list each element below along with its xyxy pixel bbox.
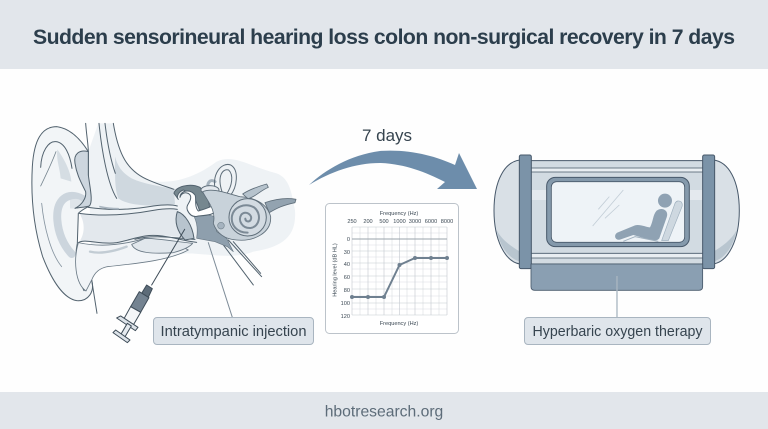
ossicles	[180, 191, 217, 216]
lower canal tissue	[76, 238, 188, 291]
footer banner	[0, 392, 768, 429]
ear canal	[79, 209, 193, 243]
x-axis labels: 8000	[441, 219, 453, 225]
7 days label: 7 days	[362, 126, 412, 145]
audiogram card: Frequency (Hz)	[380, 321, 418, 327]
label: intratympanic injection: Intratympanic injection	[160, 324, 306, 340]
cochlea	[229, 199, 266, 236]
label: hyperbaric oxygen therapy: Hyperbaric oxygen therapy	[532, 324, 703, 340]
back of ear lines	[86, 123, 97, 313]
y-axis labels: 120	[341, 314, 350, 320]
y-axis labels: 80	[344, 288, 350, 294]
y-axis labels: 60	[344, 275, 350, 281]
pointer line	[208, 243, 232, 317]
temporal bone background	[88, 123, 295, 280]
auditory nerve	[265, 199, 296, 213]
y-axis labels: 100	[341, 301, 350, 307]
window	[547, 177, 689, 247]
chamber body	[530, 161, 703, 264]
curved arrow	[309, 151, 477, 189]
semicircular canals	[201, 164, 236, 196]
syringe	[113, 229, 185, 343]
title banner: Sudden sensorineural hearing loss colon non-surgical recovery in 7 days	[33, 26, 735, 49]
x-axis labels: 200	[363, 219, 373, 225]
helix inner fold	[41, 142, 72, 168]
hearing curve	[350, 256, 449, 299]
y-axis labels: 30	[344, 250, 350, 256]
audiogram card: Frequency (Hz)	[380, 211, 418, 217]
upper bone section	[115, 157, 175, 205]
outer ear	[32, 127, 93, 301]
middle ear cavity	[191, 210, 233, 252]
eustachian tube	[222, 240, 262, 285]
hyperbaric chamber illustration	[494, 155, 739, 317]
tragus fold	[75, 151, 91, 208]
patient	[615, 194, 682, 241]
vestibule	[203, 190, 271, 240]
window glare	[593, 190, 623, 226]
concha shading	[57, 196, 83, 254]
y-axis labels: 0	[347, 237, 350, 243]
label: hyperbaric oxygen therapy	[524, 318, 710, 344]
x-axis labels: 250	[347, 219, 357, 225]
x-axis labels: 1000	[393, 219, 406, 225]
x-axis labels: 6000	[425, 219, 437, 225]
metal bands	[519, 155, 531, 269]
label: intratympanic injection	[154, 318, 314, 344]
pointer line	[615, 276, 619, 317]
y-axis labels	[341, 237, 350, 320]
eardrum	[176, 212, 194, 240]
title banner	[0, 0, 768, 69]
x-axis labels: 3000	[409, 219, 421, 225]
x-axis labels: 500	[379, 219, 389, 225]
chamber end caps	[494, 160, 520, 264]
ear anatomy illustration	[32, 123, 296, 343]
base	[531, 264, 703, 290]
audiogram card: Hearing level (dB HL)	[332, 243, 338, 297]
x-axis labels	[347, 219, 453, 225]
footer banner: hbotresearch.org	[325, 404, 443, 420]
grid	[352, 227, 447, 315]
audiogram card	[326, 204, 458, 334]
y-axis labels: 40	[344, 262, 350, 268]
